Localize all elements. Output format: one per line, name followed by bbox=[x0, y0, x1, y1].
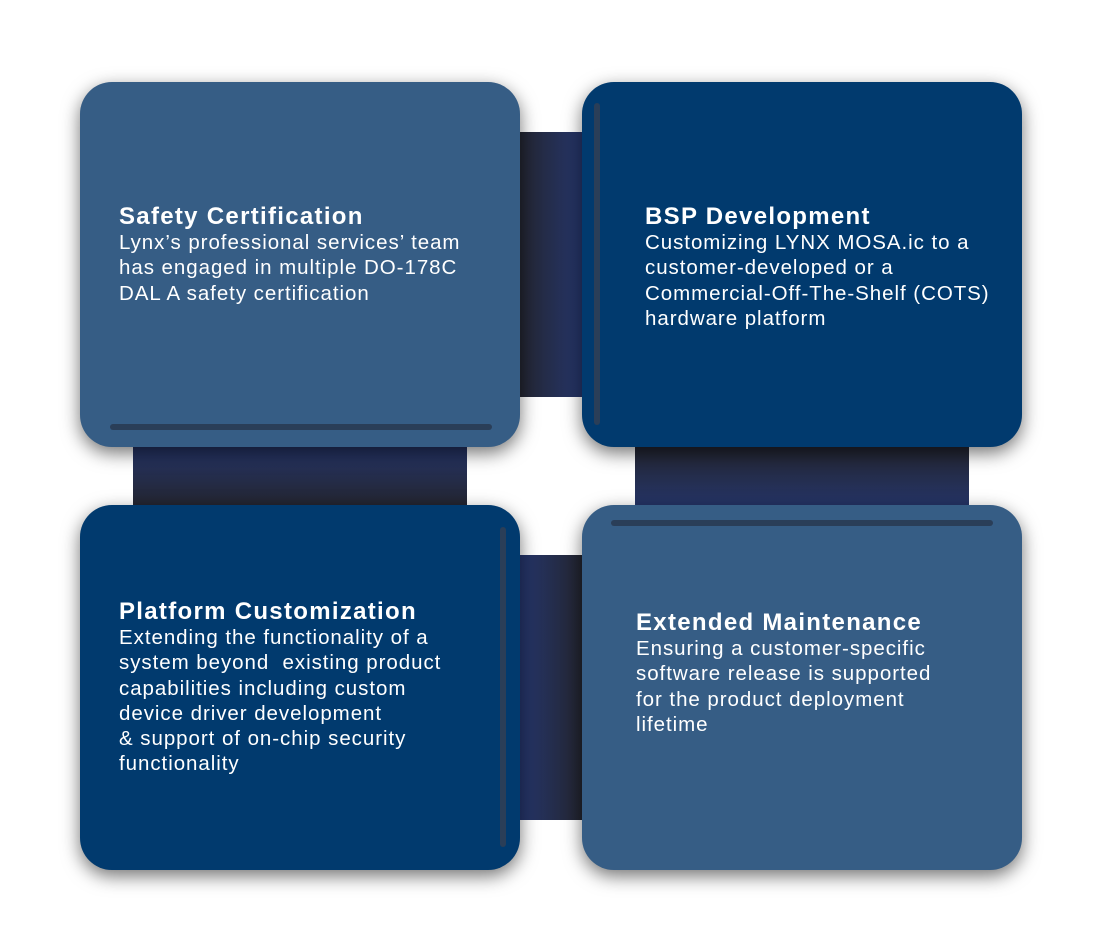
text: BSP development bbox=[645, 203, 990, 330]
panel: BSP development bbox=[582, 82, 1022, 447]
panel: extended maintenance bbox=[582, 505, 1022, 870]
text: safety certification: Lynx’s professional services’ team bbox=[119, 231, 460, 254]
text: safety certification: DAL A safety certification bbox=[119, 282, 370, 305]
text: extended maintenance: for the product deployment bbox=[636, 688, 905, 711]
text: platform customization: & support of on-chip security bbox=[119, 727, 406, 750]
text: BSP development: Customizing LYNX MOSA.ic to a bbox=[645, 231, 970, 254]
panel: platform customization bbox=[80, 505, 520, 870]
text: platform customization: functionality bbox=[119, 752, 240, 775]
connector: left bbox=[133, 425, 467, 515]
text: BSP development: hardware platform bbox=[645, 307, 826, 330]
text: extended maintenance: Extended Maintenance bbox=[636, 609, 922, 636]
text: safety certification bbox=[119, 203, 460, 305]
accent line: card 4 top bbox=[611, 520, 993, 526]
connector: top bbox=[510, 132, 600, 397]
text: BSP development: Commercial-Off-The-Shelf (COTS) bbox=[645, 282, 990, 305]
text: extended maintenance bbox=[636, 609, 931, 736]
connector: bottom bbox=[505, 555, 590, 820]
text: platform customization: Extending the functionality of a bbox=[119, 626, 429, 649]
text: extended maintenance: software release is supported bbox=[636, 662, 931, 685]
text: safety certification: Safety Certification bbox=[119, 203, 364, 230]
panel: safety certification bbox=[80, 82, 520, 447]
text: platform customization: Platform Customization bbox=[119, 598, 417, 625]
text: safety certification: has engaged in multiple DO-178C bbox=[119, 256, 457, 279]
text: BSP development: BSP Development bbox=[645, 203, 871, 230]
accent line: card 3 right bbox=[500, 527, 506, 847]
text: platform customization: system beyond existing product bbox=[119, 651, 441, 674]
text: extended maintenance: Ensuring a customer-specific bbox=[636, 637, 926, 660]
text: BSP development: customer-developed or a bbox=[645, 256, 894, 279]
text: extended maintenance: lifetime bbox=[636, 713, 709, 736]
connector: right bbox=[635, 437, 969, 527]
accent line: card 1 bottom bbox=[110, 424, 492, 430]
text: platform customization: device driver development bbox=[119, 702, 382, 725]
text: platform customization: capabilities including custom bbox=[119, 677, 406, 700]
text: platform customization bbox=[119, 598, 441, 775]
accent line: card 2 left bbox=[594, 103, 600, 425]
